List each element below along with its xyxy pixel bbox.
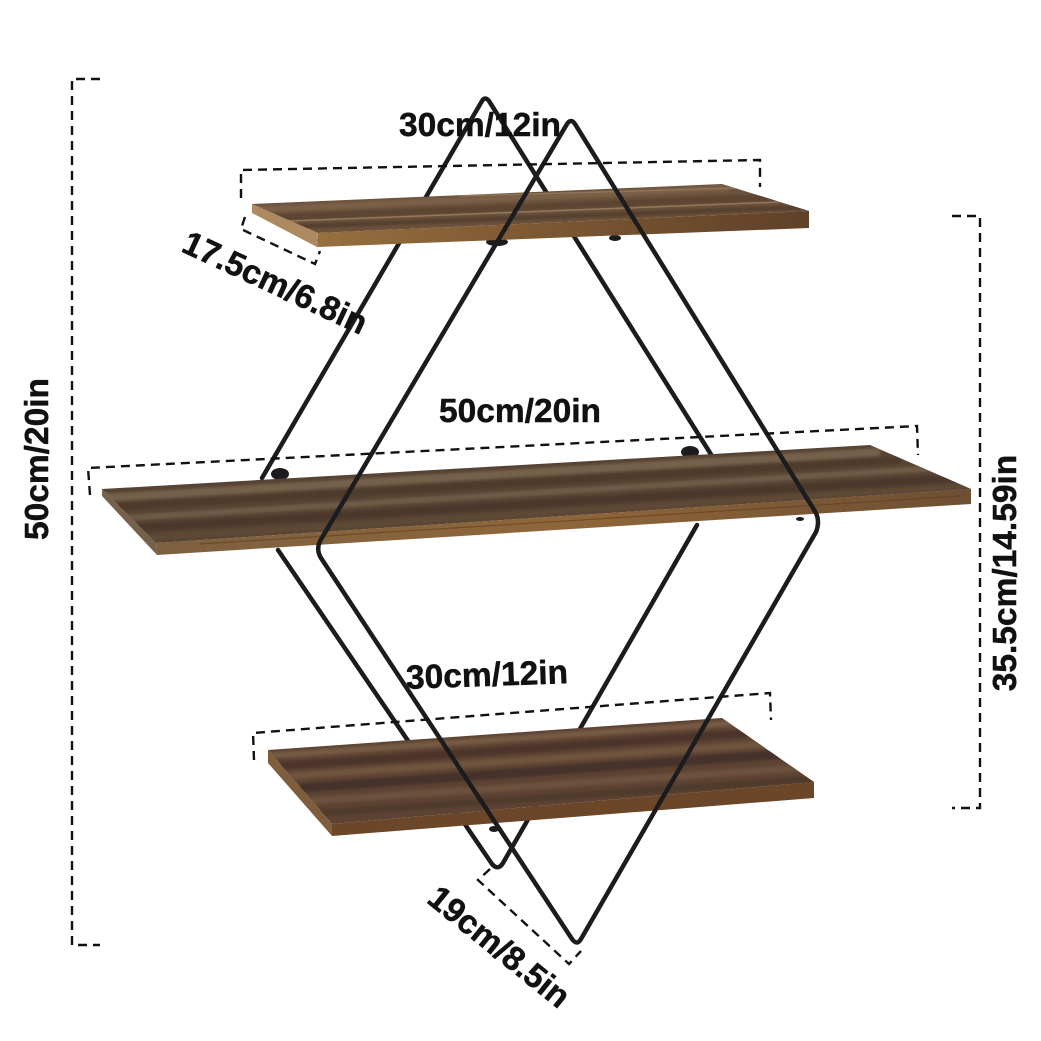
dashed line: total height [72,79,100,945]
dashed line: diamond height [952,216,980,808]
label: diamond height: 35.5cm/14.59in [987,455,1024,691]
dashed line: middle shelf width [88,426,918,495]
back wire diamond [262,98,712,867]
label: top shelf width: 30cm/12in [399,107,561,144]
dimension lines [72,79,980,964]
label: total height: 50cm/20in [19,378,56,540]
label: bottom depth: 19cm/8.5in [420,879,577,1016]
top shelf [250,184,810,247]
wall brackets [271,235,804,832]
dashed line: top shelf width [241,160,760,198]
dashed line: top shelf depth [241,217,320,264]
bottom shelf [265,718,815,836]
label: top shelf depth: 17.5cm/6.8in [177,225,373,342]
label: middle shelf width: 50cm/20in [439,393,601,430]
dashed line: bottom depth [478,869,581,964]
label: bottom shelf width: 30cm/12in [405,654,569,697]
middle shelf [100,445,975,555]
front wire diamond [318,121,818,942]
dashed line: bottom shelf width [253,693,771,760]
